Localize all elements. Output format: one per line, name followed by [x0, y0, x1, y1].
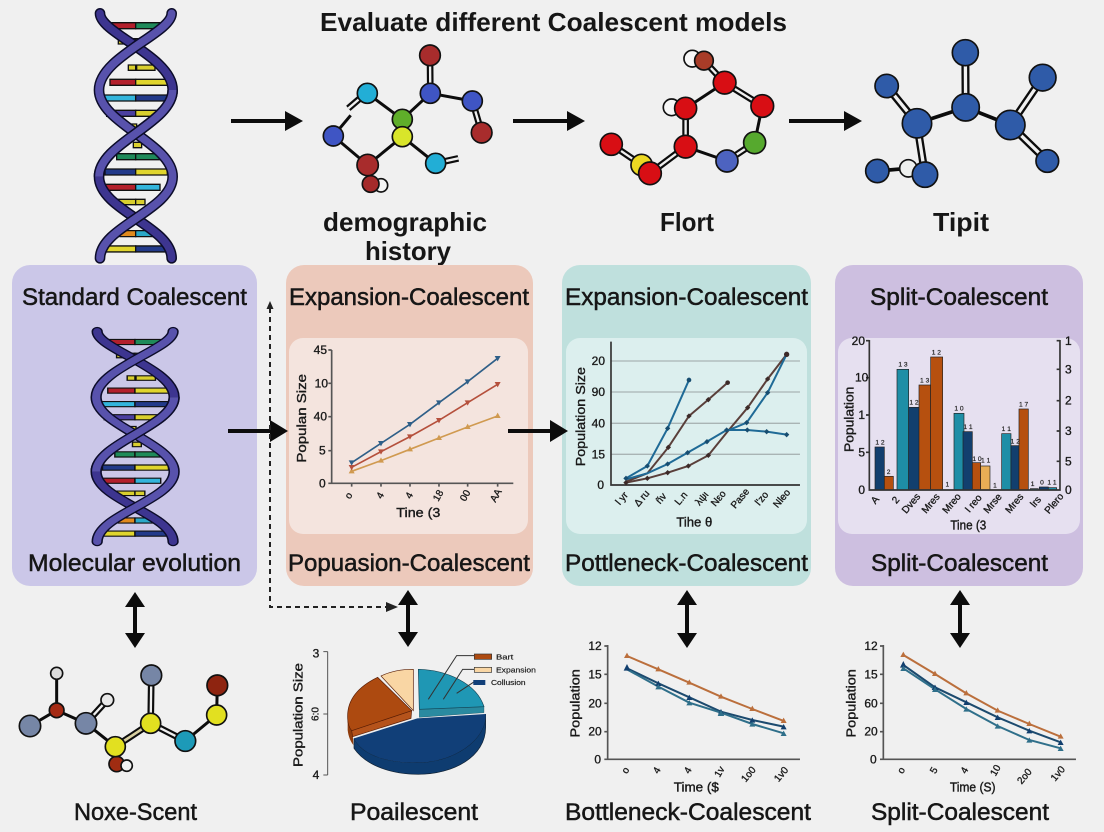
arrow: panel 1 to panel 2	[228, 420, 288, 442]
icon: DNA double helix top	[99, 13, 173, 258]
icon: molecule demographic history	[323, 45, 492, 192]
heading: demographic history: history	[365, 236, 452, 266]
chart card: line chart population size: 5	[319, 444, 326, 458]
chart card: bar chart population: 1 2	[909, 400, 919, 407]
chart card: bar chart population: 2	[890, 495, 903, 506]
chart card: bar chart population: 3	[1065, 362, 1072, 376]
chart card: multi-line chart population size: 15	[592, 447, 605, 461]
icon: molecule Tipit	[866, 40, 1059, 187]
panel caption: Split-Coalescent: Split-Coalescent	[871, 550, 1048, 577]
line chart: bottleneck decline: Population	[568, 669, 583, 737]
legend: Bart	[496, 653, 513, 662]
line chart: bottleneck decline: o	[620, 765, 633, 776]
chart card: bar chart population: 2	[1065, 394, 1072, 408]
icon: DNA double helix in panel	[96, 331, 174, 542]
chart card: multi-line chart population size: 20	[592, 354, 605, 368]
chart card: multi-line chart population size: l'zo	[753, 489, 771, 508]
chart card: bar chart population: Plero	[1043, 491, 1067, 516]
pie chart: Population Size	[290, 663, 305, 767]
line chart: bottleneck decline: 1v0	[772, 765, 791, 784]
chart card: line chart population size: 45	[314, 343, 327, 357]
line chart: split decline: Time (S)	[950, 780, 995, 795]
chart card: bar chart population: 1 2	[875, 439, 885, 446]
line chart: bottleneck decline: 4	[682, 765, 695, 776]
line chart: bottleneck decline: 20	[588, 696, 602, 710]
chart card: line chart population size: 4	[375, 490, 387, 501]
chart card: line chart population size: AA	[488, 487, 505, 504]
chart card: bar chart population: 20	[852, 334, 865, 348]
line chart: split decline: 2o0	[1016, 767, 1035, 787]
chart card: bar chart population: Tine (3	[950, 517, 986, 532]
line chart: bottleneck decline: 20	[588, 725, 602, 739]
panel heading: Split-Coalescent: Split-Coalescent	[870, 284, 1048, 311]
line chart: split decline: 4	[959, 765, 972, 776]
chart card: line chart population size: 4	[404, 490, 416, 501]
chart card: bar chart population: 1 0	[972, 456, 982, 463]
line chart: bottleneck decline: 0	[594, 752, 601, 766]
caption: Bottleneck-Coalescent: Bottleneck-Coalescent	[565, 799, 811, 826]
line chart: split decline: 12	[864, 639, 878, 653]
line chart: bottleneck decline: 4	[651, 765, 664, 776]
chart card: bar chart population: 1 1	[1002, 426, 1011, 433]
arrow: top row 1	[231, 111, 303, 131]
chart card: bar chart population: 5	[858, 445, 865, 459]
line chart: bottleneck decline: 15	[588, 667, 602, 681]
chart card: bar chart population: 1 1	[981, 458, 991, 465]
panel heading: Standard Coalescent: Standard Coalescent	[22, 284, 247, 311]
pie chart	[290, 646, 536, 782]
line chart: bottleneck decline: Time ($	[674, 780, 719, 795]
chart card: multi-line chart population size: Population Size	[573, 367, 588, 466]
panel: Split-Coalescent	[835, 265, 1083, 586]
panel heading: Expansion-Coalescent: Expansion-Coalescent	[565, 284, 808, 311]
line chart: bottleneck decline	[568, 639, 800, 795]
chart card: bar chart population: Population	[841, 387, 856, 452]
chart card: multi-line chart population size: L.n	[673, 490, 690, 508]
chart card: bar chart population: 10	[855, 371, 869, 385]
arrow: double vertical panel 2	[398, 590, 418, 647]
chart card: multi-line chart population size: 40	[592, 416, 605, 430]
panel caption: Popuasion-Coalescent: Popuasion-Coalescent	[288, 550, 530, 577]
chart card: multi-line chart population size: Nleo	[771, 487, 793, 510]
chart card: bar chart population: 5	[1065, 454, 1072, 468]
heading: demographic history	[323, 207, 487, 266]
chart card: line chart population size: 40	[314, 410, 327, 424]
chart card: bar chart population: Mres	[1004, 492, 1026, 516]
line chart: split decline: 10	[989, 763, 1004, 778]
pie slice orange	[348, 677, 412, 731]
line chart: split decline: 20	[864, 725, 878, 739]
caption: Poailescent: Poailescent	[350, 799, 478, 826]
chart card: bar chart population: 1 7	[1019, 401, 1029, 408]
chart card: line chart population size	[289, 338, 528, 534]
chart card: bar chart population: 0	[858, 483, 865, 497]
pie slice cream	[381, 669, 413, 711]
chart card: multi-line chart population size: 90	[592, 385, 605, 399]
chart card: multi-line chart population size: Pase	[729, 486, 752, 511]
line chart: split decline: 0	[870, 752, 877, 766]
panel caption: Molecular evolution: Molecular evolution	[28, 550, 241, 577]
pie slice navy	[354, 714, 486, 763]
chart card: bar chart population: 1 2	[932, 349, 941, 356]
chart card: bar chart population: 3	[1065, 424, 1072, 438]
chart card: bar chart population: lrs	[1029, 495, 1044, 510]
chart card: bar chart population: 2	[887, 469, 891, 476]
chart card: bar chart population	[838, 334, 1080, 534]
line chart: split decline	[843, 639, 1076, 795]
arrow: double vertical panel 4	[950, 590, 970, 648]
line chart: split decline: 5	[928, 765, 941, 776]
chart card: bar chart population: Mres	[920, 492, 943, 516]
chart card: bar chart population: I reo	[963, 492, 985, 515]
title: Evaluate different Coalescent models	[320, 7, 787, 37]
arrow: top row 3	[789, 111, 862, 131]
caption: Noxe-Scent: Noxe-Scent	[74, 799, 197, 826]
chart card: line chart population size: Tine (3	[396, 505, 440, 520]
chart card: bar chart population: Dves	[900, 492, 923, 516]
chart card: line chart population size: 18	[431, 488, 447, 503]
panel: Standard Coalescent	[12, 265, 257, 586]
chart card: bar chart population: A	[869, 494, 882, 507]
line chart: bottleneck decline: 12	[588, 639, 602, 653]
chart card: bar chart population: Mreo	[941, 491, 964, 516]
chart card: multi-line chart population size: λψι	[693, 490, 711, 508]
heading: Tipit: Tipit	[933, 207, 989, 237]
line chart: split decline: o	[896, 765, 908, 776]
chart card: multi-line chart population size: Δ ru	[632, 489, 652, 509]
panel caption: Pottleneck-Coalescent: Pottleneck-Coalescent	[565, 550, 808, 577]
legend: Expansion	[496, 666, 536, 675]
panel: Expansion-Coalescent population	[286, 265, 533, 586]
arrow: double vertical panel 3	[677, 590, 697, 648]
line chart: split decline: 15	[864, 667, 878, 681]
chart card: multi-line chart population size: ñv	[654, 491, 669, 506]
chart card: line chart population size: Populan Size	[294, 374, 309, 463]
chart card: line chart population size: 00	[458, 488, 474, 503]
legend: Collusion	[491, 678, 526, 687]
icon: molecule Noxe-Scent	[19, 665, 228, 772]
heading: demographic history: demographic	[323, 207, 487, 237]
chart card: bar chart population: 1 3	[920, 377, 930, 384]
arrow: top row 2	[513, 111, 585, 131]
icon: molecule Flort	[600, 50, 774, 185]
chart card: bar chart population: 1	[945, 482, 949, 489]
line chart: bottleneck decline: 1o0	[740, 765, 759, 785]
chart card: bar chart population: 1	[993, 483, 997, 490]
pie chart: 4	[313, 768, 320, 782]
chart card: bar chart population: 1 3	[898, 362, 908, 369]
chart card: multi-line chart population size	[566, 338, 807, 534]
chart card: bar chart population: Mrse	[982, 491, 1005, 516]
line chart: split decline: 1v0	[1049, 764, 1068, 784]
chart card: line chart population size: o	[343, 490, 356, 501]
pie slice teal	[418, 669, 484, 709]
chart card: multi-line chart population size: Nεo	[709, 488, 729, 509]
chart card: multi-line chart population size: 0	[597, 478, 604, 492]
chart card: bar chart population: 0	[1065, 483, 1072, 497]
line chart: split decline: Population	[843, 669, 858, 737]
pie slice side depth	[354, 714, 486, 774]
line chart: split decline: 60	[864, 696, 878, 710]
chart card: bar chart population: 1	[1031, 481, 1035, 488]
chart card: line chart population size: 0	[319, 476, 326, 490]
arrow: dashed connector to pie chart	[266, 301, 398, 612]
pie chart: 6:0	[311, 707, 322, 721]
chart card: bar chart population: 1 2	[1011, 438, 1020, 445]
legend	[473, 653, 536, 687]
chart card: multi-line chart population size: Tihe θ	[676, 515, 712, 530]
pie chart: 3	[313, 646, 320, 660]
heading: Flort: Flort	[660, 207, 714, 237]
chart card: bar chart population: 1 1	[963, 424, 973, 431]
chart card: bar chart population: 1	[1065, 334, 1072, 348]
panel heading: Expansion-Coalescent: Expansion-Coalescent	[289, 284, 529, 311]
chart card: line chart population size: 10	[315, 376, 328, 390]
arrow: panel 2 to panel 3	[508, 420, 568, 442]
chart card: multi-line chart population size: l yr	[614, 490, 631, 507]
chart card: bar chart population: 1	[858, 408, 865, 422]
caption: Split-Coalescent bottom: Split-Coalescent	[871, 799, 1049, 826]
panel: Expansion-Coalescent bottleneck	[562, 265, 811, 586]
arrow: double vertical panel 1	[125, 592, 145, 648]
line chart: bottleneck decline: 1v	[713, 765, 728, 779]
chart card: bar chart population: 1 1	[1047, 480, 1057, 487]
chart card: bar chart population: 0	[1040, 480, 1044, 487]
chart card: bar chart population: 1 0	[954, 406, 964, 413]
